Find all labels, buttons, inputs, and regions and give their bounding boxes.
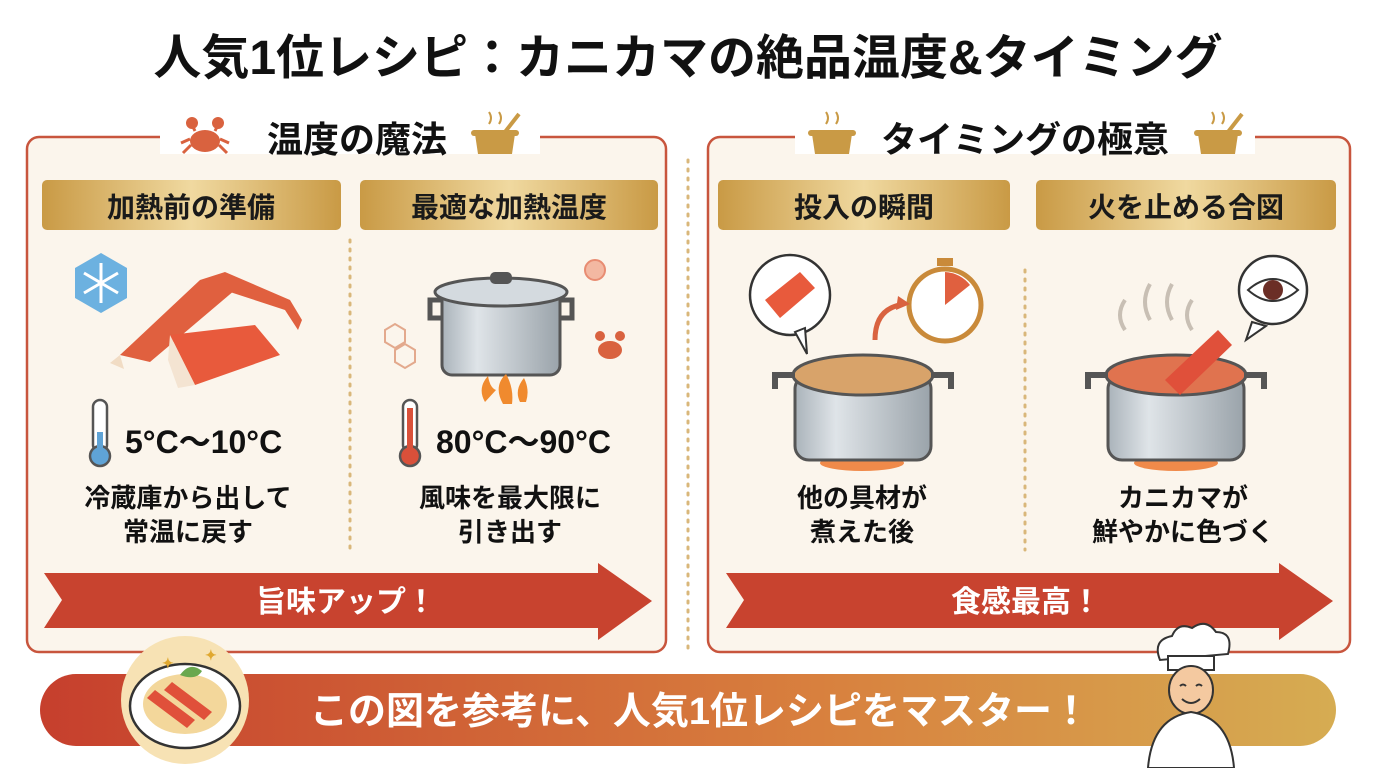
panel heading: 温度の魔法 [181,112,519,160]
panel heading: 温度の魔法: 温度の魔法 [267,119,447,160]
icon: crab [181,117,229,153]
text: 冷蔵庫から出して: 冷蔵庫から出して [84,483,292,513]
icon: chef [1148,624,1234,768]
subheader: 加熱前の準備: 加熱前の準備 [107,192,275,223]
banner: bottom message: この図を参考に、人気1位レシピをマスター！ [310,691,1090,733]
text: 他の具材が: 煮えた後 [810,517,914,547]
text: 他の具材が: 他の具材が [797,483,927,513]
panel heading: タイミングの極意: タイミングの極意 [881,119,1169,160]
arrow: 旨味アップ: 旨味アップ！ [256,586,436,619]
illustration: pot with kanikama bubble and timer [750,255,981,471]
subheader: 火を止める合図 [1036,180,1336,230]
title: 人気1位レシピ：カニカマの絶品温度&タイミング [153,32,1223,85]
arrow: 食感最高: 食感最高！ [951,586,1101,619]
text: 冷蔵庫から出して: 常温に戻す [123,517,253,547]
banner: bottom message [40,624,1336,768]
subheader: 投入の瞬間 [718,180,1010,230]
temperature: 80°C〜90°C: 80°C〜90°C [436,424,611,460]
text: 風味を最大限に: 引き出す [458,517,562,547]
subheader: 最適な加熱温度 [360,180,658,230]
text: 風味を最大限に: 風味を最大限に [419,483,601,513]
icon: cold thermometer [90,400,110,466]
icon: plate with kanikama: ✦ [205,647,217,663]
arrow: 食感最高 [726,563,1333,640]
illustration: crab leg and kanikama [110,272,302,388]
icon: hot thermometer [400,400,420,466]
illustration: pot on fire [385,260,625,404]
arrow: 旨味アップ [44,563,652,640]
divider between panels [686,160,690,650]
icon: plate with kanikama: ✦ [162,655,174,671]
temperature: 5°C〜10°C: 5°C〜10°C [125,424,282,460]
text: カニカマが: 鮮やかに色づく [1092,517,1274,547]
panel: timing [708,112,1350,652]
subheader: 最適な加熱温度: 最適な加熱温度 [411,192,607,223]
subheader: 火を止める合図: 火を止める合図 [1088,192,1284,223]
panel heading: タイミングの極意 [808,112,1242,160]
panel: temperature magic [27,112,666,652]
icon: plate with kanikama [121,636,249,764]
icon: snowflake [75,253,127,313]
subheader: 投入の瞬間: 投入の瞬間 [794,192,934,223]
illustration: pot with kanikama and eye [1088,256,1307,471]
subheader: 加熱前の準備 [42,180,341,230]
text: カニカマが: カニカマが [1118,483,1248,513]
icon: pot steam [471,112,519,154]
